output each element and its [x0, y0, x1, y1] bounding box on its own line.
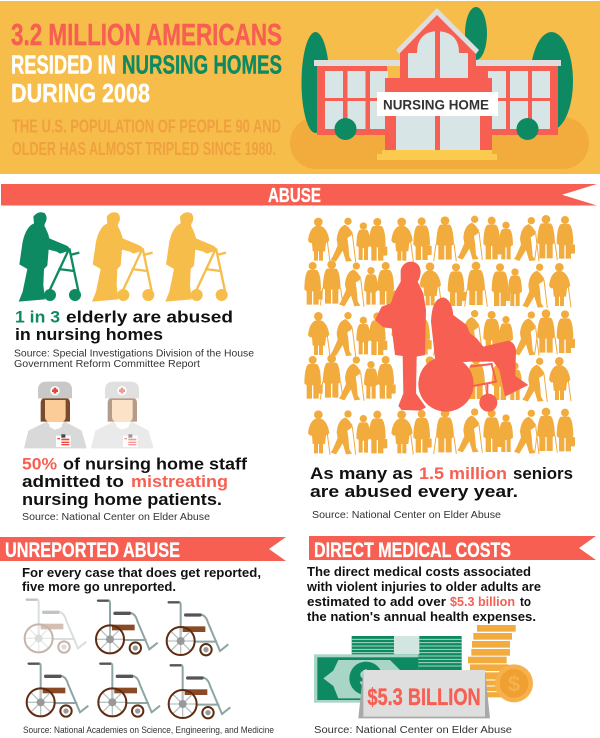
statistic text: 50%	[22, 454, 57, 474]
body text: $5.3 billion	[450, 594, 515, 609]
source: Government Reform Committee Report	[14, 359, 200, 370]
headline: 3.2 MILLION AMERICANS	[11, 18, 282, 52]
icon: two nurses	[24, 382, 154, 448]
icon: money and coins with sign: $	[508, 671, 520, 696]
body text	[22, 565, 261, 594]
source: Source: National Academies on Science, Engineering, and Medicine	[23, 725, 274, 735]
icon: caregiver and wheelchair	[375, 262, 528, 412]
statistic text: elderly are abused	[66, 308, 233, 326]
statistic text: in nursing homes	[15, 325, 163, 344]
body text: with violent injuries to older adults are	[306, 579, 541, 594]
subheading: THE U.S. POPULATION OF PEOPLE 90 AND	[12, 116, 281, 136]
source: Source: National Center on Elder Abuse	[312, 510, 501, 521]
body text: five more go unreported.	[22, 579, 176, 594]
statistic text: are abused every year.	[310, 482, 518, 501]
section banner: abuse: ABUSE	[268, 185, 321, 207]
section banner: abuse	[1, 184, 597, 207]
body text: to	[520, 594, 531, 609]
source	[14, 348, 254, 370]
icon: money and coins with sign	[314, 625, 533, 718]
panel: 1 in 3 elderly	[14, 212, 254, 370]
section banner: DIRECT MEDICAL COSTS	[314, 539, 511, 562]
body text: For every case that does get reported,	[22, 565, 261, 580]
statistic text: admitted to	[22, 472, 124, 491]
source: Source: National Center on Elder Abuse	[314, 725, 512, 736]
panel: unreported abuse	[0, 537, 286, 735]
statistic text	[310, 464, 573, 501]
headline: DURING 2008	[11, 78, 150, 108]
statistic text: 1 in 3	[15, 308, 60, 326]
header panel	[0, 1, 600, 174]
icon: money and coins with sign: $5.3 BILLION	[367, 684, 481, 711]
source: Source: National Center on Elder Abuse	[22, 512, 210, 523]
icon: three seniors with walkers	[19, 212, 228, 302]
crowd of seniors	[304, 215, 575, 455]
statistic text: 1.5 million	[419, 464, 507, 483]
body text: the nation's annual health expenses.	[307, 609, 536, 624]
statistic text: seniors	[513, 464, 573, 483]
icon: money and coins with sign: $	[360, 666, 373, 692]
panel: 1.5 million seniors	[304, 215, 575, 521]
panel: direct medical costs	[306, 536, 596, 736]
subheading: OLDER HAS ALMOST TRIPLED SINCE 1980.	[12, 138, 276, 159]
body text: The direct medical costs associated	[307, 564, 531, 579]
icon: nursing home building	[290, 7, 589, 169]
source: Source: Special Investigations Division of the House	[14, 348, 254, 360]
statistic text: As many as	[310, 464, 413, 483]
panel: nursing staff	[22, 382, 247, 523]
subheading	[12, 116, 281, 159]
headline: RESIDED IN	[11, 50, 116, 80]
section banner: UNREPORTED ABUSE	[5, 539, 180, 562]
headline: NURSING HOMES	[122, 50, 282, 80]
statistic text: mistreating	[131, 472, 228, 491]
body text: estimated to add over	[307, 594, 446, 609]
statistic text	[22, 454, 247, 509]
statistic text: of nursing home staff	[63, 454, 247, 474]
body text	[306, 564, 541, 624]
icon: nursing home building: NURSING HOME	[383, 96, 489, 112]
statistic text	[15, 308, 233, 344]
icon: six wheelchairs	[25, 600, 230, 718]
statistic text: nursing home patients.	[22, 490, 222, 509]
headline	[11, 18, 282, 108]
